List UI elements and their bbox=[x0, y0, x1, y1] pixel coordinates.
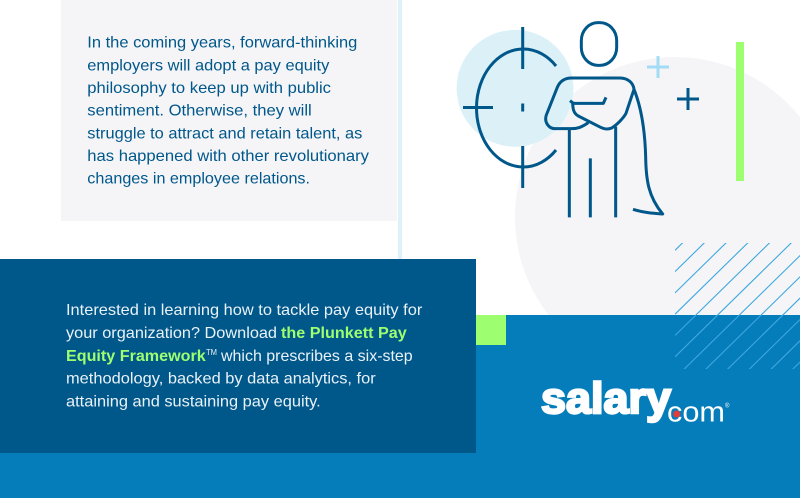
light blue vertical rule bbox=[398, 0, 402, 259]
large grey background circle bbox=[515, 57, 800, 377]
green vertical bar bbox=[736, 42, 744, 181]
icon: dark blue plus bbox=[677, 88, 699, 110]
logo: salary.com bbox=[541, 374, 730, 429]
text block: download framework: Interested in learning how to tackle pay equity for bbox=[66, 302, 423, 319]
green accent square bbox=[476, 315, 506, 345]
text block: download framework: TM bbox=[206, 348, 217, 357]
text block: pay equity philosophy: changes in employee relations. bbox=[87, 171, 310, 188]
light blue circle behind target bbox=[457, 30, 573, 147]
diagonal hatch pattern bbox=[675, 243, 800, 369]
text block: download framework: the Plunkett Pay bbox=[281, 325, 407, 342]
text block: pay equity philosophy: struggle to attract and retain talent, as bbox=[87, 125, 362, 142]
text block: pay equity philosophy: employers will adopt a pay equity bbox=[87, 57, 329, 74]
text block: download framework: your organization? Download bbox=[66, 325, 277, 342]
icon: person with cape and crossed arms bbox=[546, 23, 663, 217]
text block: download framework: Equity Framework bbox=[66, 348, 206, 365]
text block: download framework: which prescribes a six-step bbox=[220, 348, 413, 365]
logo: salary.com: com bbox=[667, 397, 725, 429]
text block: pay equity philosophy bbox=[87, 35, 369, 188]
text block: download framework bbox=[66, 302, 423, 411]
text block: download framework: methodology, backed by data analytics, for bbox=[66, 371, 376, 388]
text block: pay equity philosophy: sentiment. Otherwise, they will bbox=[87, 103, 312, 120]
panel: intro text bbox=[61, 0, 397, 221]
logo: salary.com: salary bbox=[541, 374, 672, 423]
text block: pay equity philosophy: philosophy to keep up with public bbox=[87, 80, 331, 97]
blue footer band bbox=[0, 315, 800, 498]
panel: call to action bbox=[0, 259, 476, 453]
icon: crosshair target bbox=[463, 27, 556, 188]
text block: pay equity philosophy: In the coming years, forward-thinking bbox=[87, 35, 357, 52]
text block: download framework: attaining and sustaining pay equity. bbox=[66, 394, 321, 411]
text block: pay equity philosophy: has happened with other revolutionary bbox=[87, 148, 369, 165]
icon: light blue plus bbox=[647, 56, 669, 78]
logo: salary.com: ® bbox=[725, 402, 730, 410]
